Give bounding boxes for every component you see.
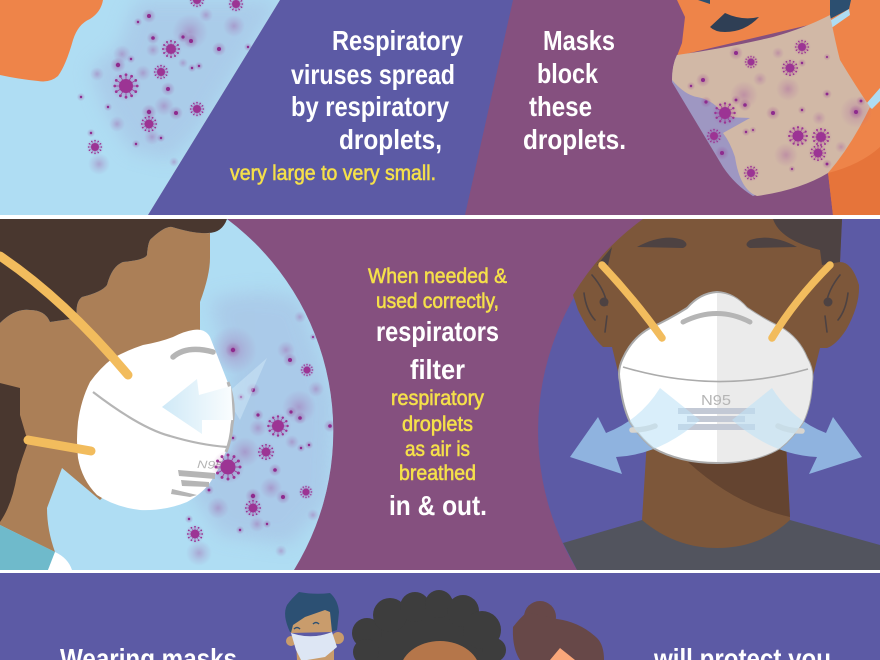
upper straps	[602, 265, 830, 338]
person wearing cloth mask, right	[672, 0, 880, 215]
text: masks block these droplets: droplets.	[523, 124, 626, 155]
respirator, front view	[598, 261, 834, 464]
mask body	[672, 15, 870, 196]
virus at mask edge	[212, 450, 244, 484]
hair	[0, 219, 227, 323]
man with mask	[285, 592, 344, 660]
face	[677, 0, 830, 56]
shirt	[0, 525, 55, 570]
brows	[637, 238, 797, 248]
text: respiratory viruses spread	[230, 25, 463, 185]
panel: droplets and surgical masks	[0, 0, 880, 215]
man, front view	[538, 219, 880, 570]
text: respiratory viruses spread: Respiratory	[332, 25, 463, 56]
panel: protect you	[0, 573, 880, 660]
smile	[710, 13, 759, 32]
droplet cloud, respirator	[185, 292, 336, 566]
N95 label: N95	[197, 459, 224, 472]
text: respirators filter	[368, 265, 507, 521]
woman with afro	[352, 590, 506, 660]
purple background band	[148, 0, 513, 215]
woman with bun	[513, 601, 604, 660]
text: respirators filter: breathed	[399, 462, 476, 485]
shirt	[563, 520, 880, 570]
exhale arrows behind respirator	[570, 388, 862, 474]
nose bar	[683, 314, 750, 322]
mask lining	[672, 55, 770, 196]
text: respirators filter: respiratory	[391, 387, 484, 410]
text: masks block these droplets: these	[529, 91, 592, 122]
droplet cloud, left	[77, 0, 280, 175]
mask strap	[828, 9, 880, 109]
upper strap	[0, 256, 128, 375]
text: respirators filter: When needed &	[368, 265, 507, 288]
faint breath band beyond respirator	[225, 358, 267, 420]
label bars	[171, 470, 215, 497]
text: respirators filter: used correctly,	[376, 290, 499, 313]
label bars	[678, 408, 755, 430]
nose bar	[173, 349, 213, 357]
text: respirators filter: respirators	[376, 316, 499, 347]
text: respirators filter: in & out.	[389, 490, 487, 521]
light blue circle	[0, 219, 333, 570]
woman, profile	[0, 219, 227, 570]
text: masks block these droplets	[523, 25, 626, 155]
head and ears	[573, 219, 859, 380]
text: masks block these droplets: Masks	[543, 25, 615, 56]
breath arrow	[162, 379, 233, 434]
respirator, side view	[0, 256, 234, 510]
fold line	[93, 392, 227, 447]
ear details	[584, 275, 848, 332]
text: masks block these droplets: block	[537, 58, 598, 89]
text: respiratory viruses spread: very large to very small.	[230, 162, 436, 185]
fold line	[623, 367, 808, 382]
text: respiratory viruses spread: droplets,	[339, 124, 442, 155]
neck and shoulder	[826, 0, 880, 215]
hair	[597, 219, 842, 265]
skin	[0, 227, 210, 552]
panel: respirators	[0, 219, 880, 570]
text: respiratory viruses spread: viruses spread	[291, 59, 455, 90]
purple circle background	[538, 219, 880, 570]
text: respirators filter: filter	[410, 354, 465, 385]
neck	[642, 440, 790, 548]
lower straps	[632, 426, 802, 431]
exhale arrows over respirator	[630, 388, 804, 449]
droplets on mask	[687, 38, 872, 182]
N95 label: N95	[701, 392, 731, 409]
lower strap	[28, 440, 91, 451]
text: respirators filter: droplets	[402, 413, 473, 436]
person's face edge, left	[0, 0, 103, 81]
text: respirators filter: as air is	[405, 438, 470, 461]
hair	[698, 0, 851, 19]
text: respiratory viruses spread: by respiratory	[291, 91, 449, 122]
light blue background	[0, 0, 280, 215]
